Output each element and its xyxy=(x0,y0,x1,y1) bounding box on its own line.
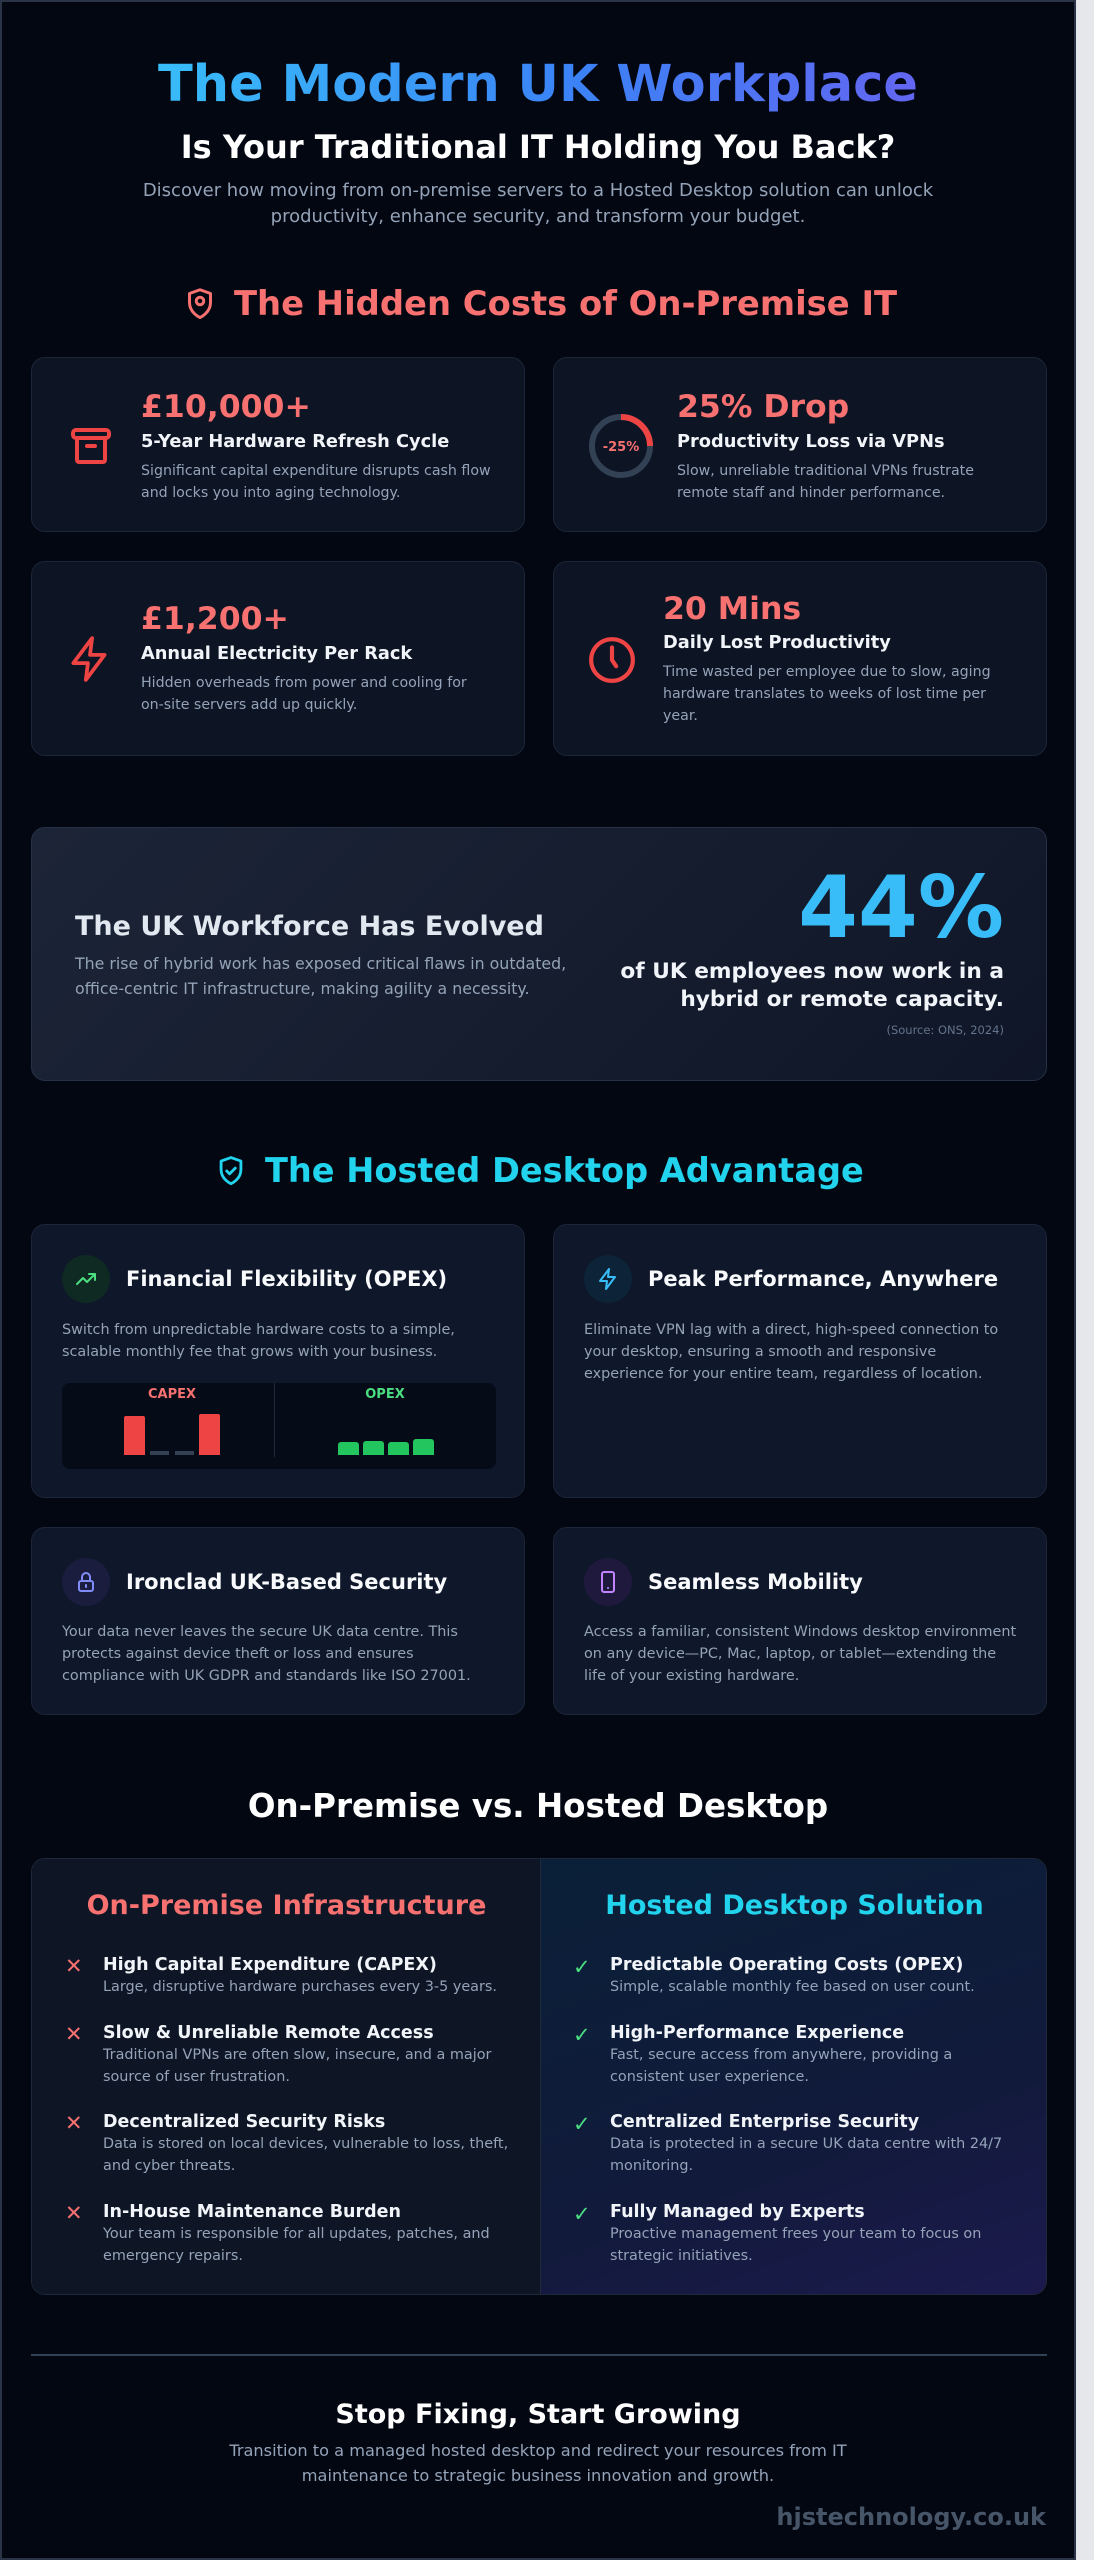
panel: electricity: Annual Electricity Per Rack xyxy=(141,643,412,664)
column: on-premise: source of user frustration. xyxy=(103,2069,290,2085)
text: The rise of hybrid work has exposed critical flaws in outdated, xyxy=(75,954,566,973)
icon: tablet xyxy=(584,1558,632,1606)
column: hosted: strategic initiatives. xyxy=(610,2248,753,2264)
footer brand: hjstechnology.co.uk xyxy=(776,2503,1046,2531)
column: on-premise: ✕ xyxy=(65,2111,83,2135)
column: on-premise: High Capital Expenditure (CAPEX) xyxy=(103,1955,437,1975)
panel: financial flexibility: scalable monthly fee that grows with your business. xyxy=(62,1344,437,1360)
column: on-premise: Data is stored on local devices, vulnerable to loss, theft, xyxy=(103,2136,508,2152)
panel: lost productivity: Time wasted per employee due to slow, aging xyxy=(663,664,991,680)
column: on-premise: In-House Maintenance Burden xyxy=(103,2202,401,2222)
panel: security: compliance with UK GDPR and standards like ISO 27001. xyxy=(62,1668,471,1684)
panel: financial flexibility: Financial Flexibility (OPEX) xyxy=(126,1267,447,1291)
column: on-premise xyxy=(32,1859,541,2296)
icon: shield pin xyxy=(188,288,212,319)
icon: donut -25% xyxy=(589,414,653,478)
panel: vpn productivity xyxy=(553,357,1047,532)
text: office-centric IT infrastructure, making agility a necessity. xyxy=(75,979,530,998)
panel: electricity: £1,200+ xyxy=(141,601,289,637)
column: hosted: Fully Managed by Experts xyxy=(610,2202,865,2222)
chart: capex vs opex: OPEX xyxy=(365,1387,405,1402)
panel: peak performance: Eliminate VPN lag with a direct, high-speed connection to xyxy=(584,1322,998,1338)
column: on-premise: and cyber threats. xyxy=(103,2158,235,2174)
icon: archive xyxy=(71,428,111,464)
panel: mobility: Seamless Mobility xyxy=(648,1570,863,1594)
heading: hidden costs: The Hidden Costs of On-Premise IT xyxy=(234,284,897,323)
column: hosted: Simple, scalable monthly fee based on user count. xyxy=(610,1979,975,1995)
panel: vpn productivity: Productivity Loss via VPNs xyxy=(677,431,945,452)
stat 44%: 44% xyxy=(798,858,1004,958)
closing text: Transition to a managed hosted desktop and redirect your resources from IT xyxy=(229,2441,847,2460)
panel: hardware refresh: £10,000+ xyxy=(141,389,311,425)
heading: comparison: On-Premise vs. Hosted Desktop xyxy=(248,1787,828,1825)
column: hosted: ✓ xyxy=(573,1955,591,1979)
column: on-premise: ✕ xyxy=(65,2022,83,2046)
icon: trend xyxy=(62,1255,110,1303)
panel: mobility: on any device—PC, Mac, laptop, or tablet—extending the xyxy=(584,1646,996,1662)
column: hosted: Hosted Desktop Solution xyxy=(605,1890,984,1921)
icon: lightning xyxy=(71,636,107,682)
column: hosted xyxy=(541,1859,1048,2296)
panel: peak performance: experience for your entire team, regardless of location. xyxy=(584,1366,982,1382)
column: hosted: Proactive management frees your team to focus on xyxy=(610,2226,981,2242)
closing heading: Stop Fixing, Start Growing xyxy=(335,2399,741,2430)
column: hosted: consistent user experience. xyxy=(610,2069,809,2085)
panel: mobility: Access a familiar, consistent Windows desktop environment xyxy=(584,1624,1016,1640)
heading: The UK Workforce Has Evolved xyxy=(75,911,544,942)
panel: security: Your data never leaves the secure UK data centre. This xyxy=(62,1624,458,1640)
intro text: Discover how moving from on-premise servers to a Hosted Desktop solution can unlock xyxy=(143,180,933,201)
closing text xyxy=(229,2441,847,2485)
icon: shield check xyxy=(220,1156,242,1186)
icon: clock xyxy=(589,637,635,683)
chart: capex vs opex xyxy=(62,1383,496,1469)
column: on-premise: On-Premise Infrastructure xyxy=(87,1890,486,1921)
column: on-premise: Large, disruptive hardware purchases every 3-5 years. xyxy=(103,1979,497,1995)
panel: electricity xyxy=(31,561,525,756)
panel: comparison table xyxy=(31,1858,1047,2295)
panel: peak performance: your desktop, ensuring a smooth and responsive xyxy=(584,1344,936,1360)
column: hosted: ✓ xyxy=(573,2112,591,2136)
panel: hardware refresh: and locks you into aging technology. xyxy=(141,485,400,501)
icon: bolt xyxy=(584,1255,632,1303)
stat caption: of UK employees now work in a xyxy=(620,959,1004,984)
panel: lost productivity: hardware translates to weeks of lost time per xyxy=(663,686,986,702)
panel: electricity: Hidden overheads from power and cooling for xyxy=(141,675,467,691)
panel: mobility xyxy=(553,1527,1047,1715)
column: hosted: monitoring. xyxy=(610,2158,693,2174)
panel: lost productivity xyxy=(553,561,1047,756)
column: on-premise: Your team is responsible for all updates, patches, and xyxy=(103,2226,490,2242)
icon: donut -25%: -25% xyxy=(603,440,639,455)
subtitle: Is Your Traditional IT Holding You Back? xyxy=(181,128,895,166)
panel: lost productivity: Daily Lost Productivity xyxy=(663,632,891,653)
closing text: maintenance to strategic business innovation and growth. xyxy=(302,2466,774,2485)
panel: lost productivity: year. xyxy=(663,708,698,724)
column: hosted: ✓ xyxy=(573,2023,591,2047)
icon: lock xyxy=(62,1558,110,1606)
text xyxy=(74,954,566,998)
panel: security: protects against device theft or loss and ensures xyxy=(62,1646,414,1662)
column: on-premise: ✕ xyxy=(65,1954,83,1978)
chart: capex vs opex: CAPEX xyxy=(148,1387,196,1402)
column: hosted: High-Performance Experience xyxy=(610,2023,904,2043)
heading: hosted advantage: The Hosted Desktop Advantage xyxy=(265,1151,864,1190)
column: on-premise: Slow & Unreliable Remote Access xyxy=(103,2023,434,2043)
stat caption xyxy=(620,959,1004,1012)
column: hosted: Data is protected in a secure UK data centre with 24/7 xyxy=(610,2136,1002,2152)
panel: electricity: on-site servers add up quickly. xyxy=(141,697,357,713)
panel: peak performance xyxy=(553,1224,1047,1498)
panel: peak performance: Peak Performance, Anywhere xyxy=(648,1267,998,1291)
column: on-premise: emergency repairs. xyxy=(103,2248,243,2264)
panel: hardware refresh xyxy=(31,357,525,532)
column: hosted: Predictable Operating Costs (OPEX) xyxy=(610,1955,963,1975)
panel: financial flexibility: Switch from unpredictable hardware costs to a simple, xyxy=(62,1322,455,1338)
panel: hardware refresh: 5-Year Hardware Refresh Cycle xyxy=(141,431,449,452)
intro text xyxy=(143,180,933,227)
column: hosted: Fast, secure access from anywhere, providing a xyxy=(610,2047,952,2063)
panel: lost productivity: 20 Mins xyxy=(663,591,801,627)
source: (Source: ONS, 2024) xyxy=(886,1023,1004,1037)
column: on-premise: ✕ xyxy=(65,2201,83,2225)
panel: mobility: life of your existing hardware. xyxy=(584,1668,799,1684)
panel: security: Ironclad UK-Based Security xyxy=(126,1570,447,1594)
panel: security xyxy=(31,1527,525,1715)
panel: vpn productivity: 25% Drop xyxy=(677,389,849,425)
title: The Modern UK Workplace xyxy=(158,55,918,114)
column: hosted: Centralized Enterprise Security xyxy=(610,2112,919,2132)
panel: vpn productivity: Slow, unreliable traditional VPNs frustrate xyxy=(677,463,974,479)
intro text: productivity, enhance security, and transform your budget. xyxy=(271,206,805,227)
panel: financial flexibility xyxy=(31,1224,525,1498)
column: on-premise: Decentralized Security Risks xyxy=(103,2112,385,2132)
panel: hardware refresh: Significant capital expenditure disrupts cash flow xyxy=(141,463,491,479)
column: on-premise: Traditional VPNs are often slow, insecure, and a major xyxy=(103,2047,491,2063)
column: hosted: ✓ xyxy=(573,2202,591,2226)
panel: vpn productivity: remote staff and hinder performance. xyxy=(677,485,945,501)
panel: UK workforce stat xyxy=(31,827,1047,1081)
stat caption: hybrid or remote capacity. xyxy=(680,987,1004,1012)
